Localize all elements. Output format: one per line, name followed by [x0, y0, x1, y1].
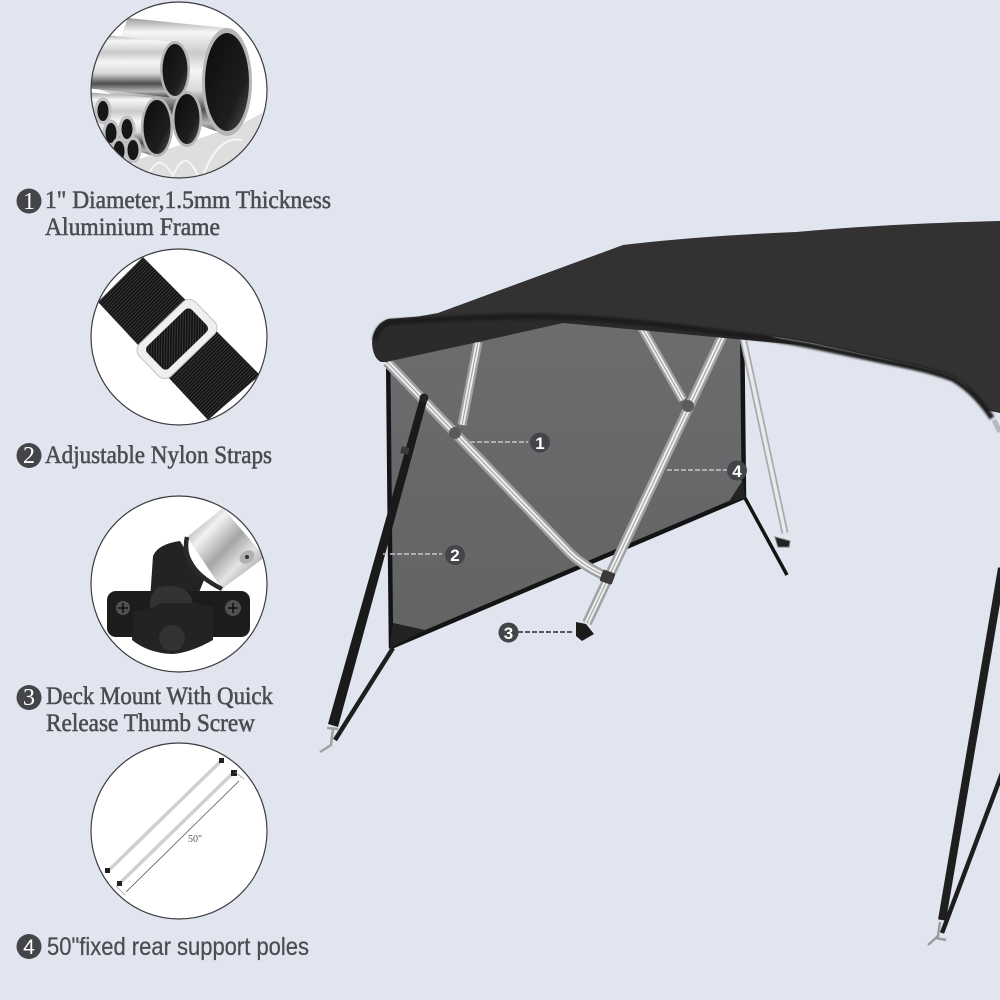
badge 3: 3 [23, 685, 35, 711]
pole: second support [642, 328, 683, 400]
text: feature 1: 1" Diameter,1.5mm Thickness [45, 187, 331, 214]
callout 4 [667, 460, 747, 481]
left strap [320, 398, 427, 752]
strap: right rear lower [928, 568, 1000, 945]
badge 3 [16, 685, 42, 711]
rear strap [745, 498, 787, 575]
callout 1: 1 [535, 434, 545, 453]
icon: nylon strap with buckle [91, 249, 267, 425]
badge 1: 1 [23, 189, 35, 215]
badge 2: 2 [23, 443, 35, 469]
pole: front bow [387, 362, 603, 575]
canopy front hem [375, 316, 992, 418]
canopy top [386, 221, 1000, 413]
icon: support poles: 50" [188, 834, 202, 845]
text: feature 1 [45, 187, 331, 241]
callout 3 [498, 622, 573, 643]
text: feature 3: Release Thumb Screw [46, 710, 255, 737]
badge 4: 4 [23, 936, 35, 959]
badge 2 [16, 443, 42, 469]
text: feature 1: Aluminium Frame [45, 214, 220, 241]
text: feature 3: Deck Mount With Quick [46, 683, 273, 710]
badge 1 [16, 188, 42, 215]
icon: aluminium tubes in circle [85, 2, 267, 182]
callout 4: 4 [732, 462, 742, 481]
callout 3: 3 [504, 624, 513, 643]
canopy underside [372, 310, 800, 362]
badge 4 [16, 934, 42, 959]
pole: long diagonal [587, 335, 723, 623]
callout 2 [383, 545, 465, 565]
pole: front support [462, 342, 478, 425]
mesh corner reinforcements [390, 480, 745, 648]
rear pole [743, 338, 790, 547]
callout 1 [470, 432, 550, 453]
icon: deck mount [91, 496, 267, 672]
pole stub: right [994, 420, 1000, 432]
icon: support poles [91, 743, 267, 919]
joints and deck mount [420, 394, 694, 641]
text: feature 4: 50"fixed rear support poles [47, 933, 309, 961]
illustration: bimini top [320, 221, 1000, 945]
text: feature 2: Adjustable Nylon Straps [45, 442, 272, 469]
text: feature 3 [46, 683, 273, 737]
mesh side panel [388, 315, 744, 647]
callout 2: 2 [450, 546, 460, 565]
